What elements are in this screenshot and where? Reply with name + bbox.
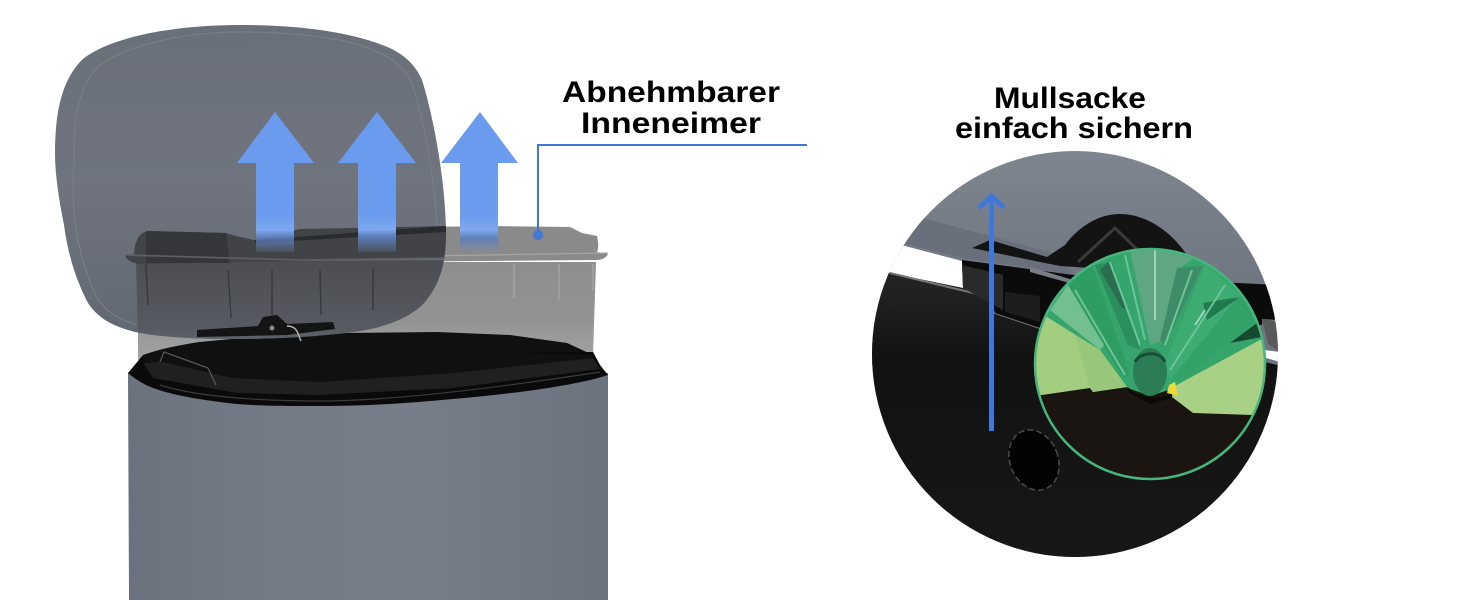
leader line with dot bbox=[533, 145, 807, 240]
green bag folds bbox=[1046, 250, 1262, 394]
inset: green bag detail bbox=[1030, 245, 1272, 485]
bin opening bbox=[143, 332, 593, 390]
circular detail photo bbox=[870, 150, 1290, 560]
right bag flap bbox=[1172, 340, 1264, 415]
black bin rim bbox=[128, 342, 608, 406]
bag opening bbox=[1133, 348, 1167, 396]
inner bucket: ghosted lifted bucket bbox=[125, 226, 608, 360]
heading: Abnehmbarer Inneneimer bbox=[562, 76, 780, 140]
bin hole bbox=[1008, 429, 1060, 491]
lid hinge bbox=[197, 315, 335, 341]
bin body bbox=[128, 373, 608, 600]
arrow 2 bbox=[338, 112, 416, 252]
lid and bin close-up bbox=[870, 150, 1290, 560]
inset ring bbox=[1035, 249, 1265, 479]
arrow 3 bbox=[441, 112, 518, 252]
blue arrow bbox=[979, 196, 1004, 431]
arrow 1 bbox=[237, 112, 314, 252]
bag edge shadow bbox=[1128, 387, 1172, 404]
bin illustration bbox=[55, 25, 608, 600]
callout: removable inner bucket bbox=[533, 76, 807, 240]
yellow tape bbox=[1167, 382, 1178, 396]
heading: Abnehmbarer Inneneimer: Abnehmbarer bbox=[562, 76, 780, 109]
blue up arrows bbox=[237, 112, 518, 252]
heading: Mullsacke einfach sichern bbox=[955, 82, 1193, 145]
heading: Mullsacke einfach sichern: einfach sichern bbox=[955, 112, 1193, 145]
heading: Mullsacke einfach sichern: Mullsacke bbox=[994, 82, 1146, 115]
lid bbox=[55, 25, 446, 339]
heading: Abnehmbarer Inneneimer: Inneneimer bbox=[581, 107, 761, 140]
inner bucket seen through lid bbox=[125, 226, 446, 345]
left bag flap bbox=[1036, 316, 1127, 396]
